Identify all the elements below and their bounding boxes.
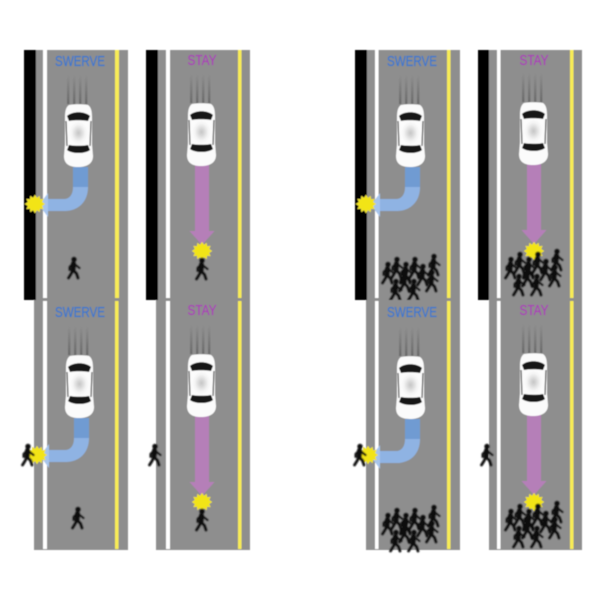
impact burst [356, 195, 376, 213]
stay arrow [190, 416, 214, 496]
car [187, 74, 216, 166]
label: stay: STAY [520, 303, 549, 319]
road [34, 300, 128, 550]
impact burst [192, 242, 212, 260]
stay arrow [522, 164, 546, 244]
label: swerve: SWERVE [55, 305, 105, 321]
roadside pedestrian [150, 444, 160, 465]
pedestrian crowd [382, 505, 440, 551]
impact burst [27, 446, 47, 464]
label: swerve: SWERVE [387, 54, 437, 70]
panel: top-right swerve, crowd ahead, wall [355, 50, 460, 300]
car [519, 73, 548, 165]
panel: top-left swerve, one pedestrian ahead, wall [24, 50, 128, 300]
pedestrian crowd [382, 254, 440, 300]
swerve arrow [40, 418, 89, 468]
road edge lines [497, 50, 574, 298]
swerve arrow [371, 167, 420, 217]
pedestrian crowd [506, 501, 562, 547]
barrier wall [24, 50, 36, 300]
panel: top-left stay, one pedestrian ahead, wall [146, 50, 250, 300]
impact burst [192, 493, 212, 511]
car [396, 327, 425, 419]
panel: top-right stay, crowd ahead, wall [478, 50, 582, 300]
impact burst [524, 242, 544, 260]
road [489, 300, 582, 550]
panel: bottom-right stay, crowd ahead, pedestrian on roadside [482, 300, 582, 550]
car [64, 75, 93, 167]
road edge lines [43, 301, 118, 549]
roadside pedestrian [22, 444, 34, 465]
pedestrian [196, 258, 208, 279]
pedestrian crowd [506, 249, 562, 295]
road edge lines [43, 50, 119, 298]
car [396, 75, 425, 167]
impact burst [25, 195, 45, 213]
car [65, 326, 94, 418]
pedestrian [68, 257, 80, 278]
pedestrian [72, 507, 84, 528]
barrier wall [355, 50, 367, 300]
road [156, 300, 250, 550]
road [489, 50, 582, 300]
pedestrian [196, 509, 208, 530]
stay arrow [190, 165, 214, 245]
panel: bottom-right swerve, crowd ahead, pedestrian on roadside [354, 300, 460, 551]
road [366, 300, 460, 550]
stay arrow [522, 415, 546, 495]
label: stay: STAY [188, 303, 217, 319]
label: stay: STAY [188, 53, 217, 69]
roadside pedestrian [354, 444, 366, 465]
road edge lines [497, 301, 574, 549]
barrier wall [146, 50, 158, 300]
road [158, 50, 250, 300]
swerve arrow [39, 167, 88, 217]
panel: bottom-left swerve, pedestrian on roadside [22, 300, 128, 550]
label: swerve: SWERVE [55, 54, 105, 70]
impact burst [524, 493, 544, 511]
label: swerve: SWERVE [387, 305, 437, 321]
impact burst [358, 446, 378, 464]
road [36, 50, 128, 300]
roadside pedestrian [482, 444, 492, 465]
barrier wall [478, 50, 489, 300]
road edge lines [166, 50, 242, 298]
car [187, 325, 216, 417]
road edge lines [375, 50, 450, 298]
road edge lines [166, 301, 242, 549]
road [367, 50, 460, 300]
car [519, 324, 548, 416]
label: stay: STAY [520, 53, 549, 69]
swerve arrow [371, 419, 420, 469]
panel: bottom-left stay, pedestrian on roadside [150, 300, 250, 550]
road edge lines [375, 301, 450, 549]
